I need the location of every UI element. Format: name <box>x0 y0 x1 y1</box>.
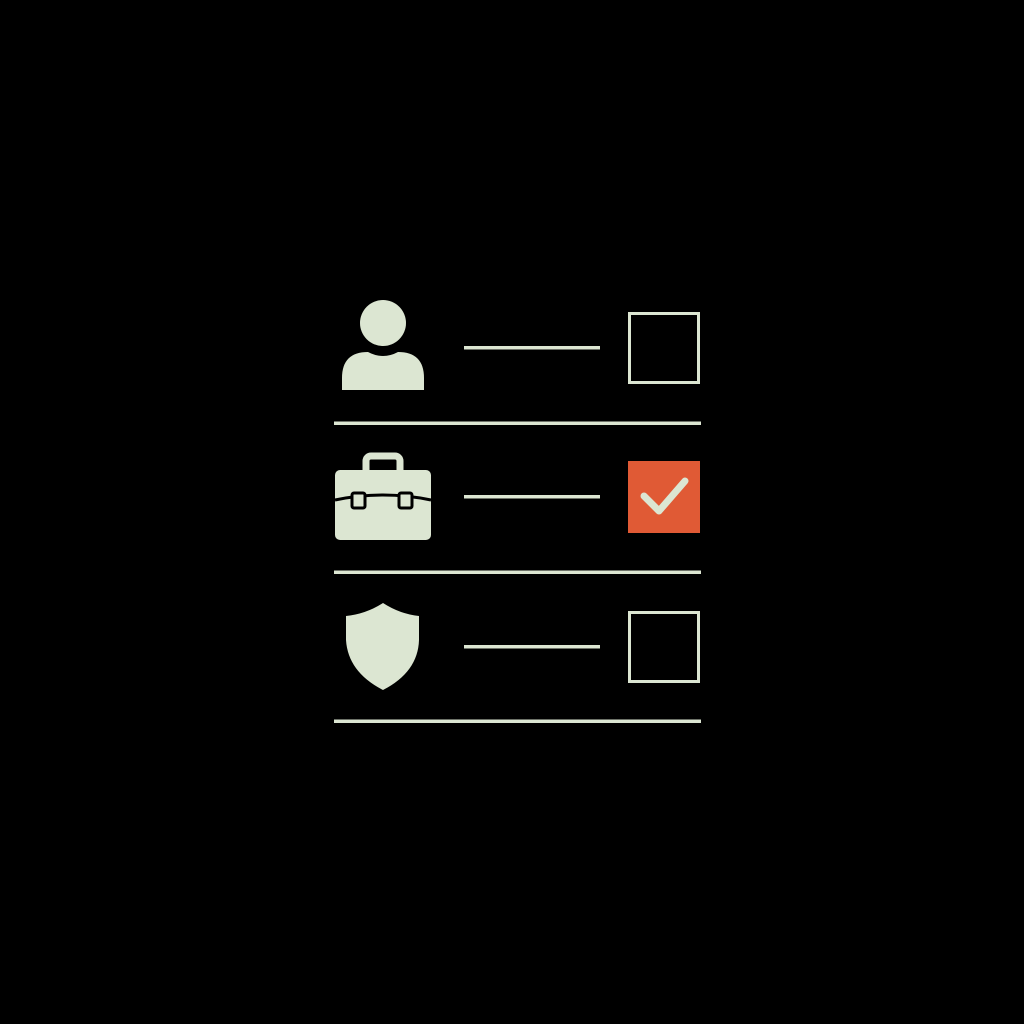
icon: shield <box>346 603 419 690</box>
checkbox empty 3 <box>630 612 698 682</box>
row 3: shield <box>346 603 698 690</box>
checkbox checked <box>628 461 700 533</box>
row 2: briefcase <box>335 456 700 540</box>
icon: person <box>342 300 424 390</box>
icon: briefcase <box>335 456 431 540</box>
checkbox empty 1 <box>630 314 698 382</box>
line placeholder 1 <box>464 346 600 350</box>
row 1: person <box>342 300 698 390</box>
line placeholder 3 <box>464 645 600 648</box>
line placeholder 2 <box>464 495 600 498</box>
